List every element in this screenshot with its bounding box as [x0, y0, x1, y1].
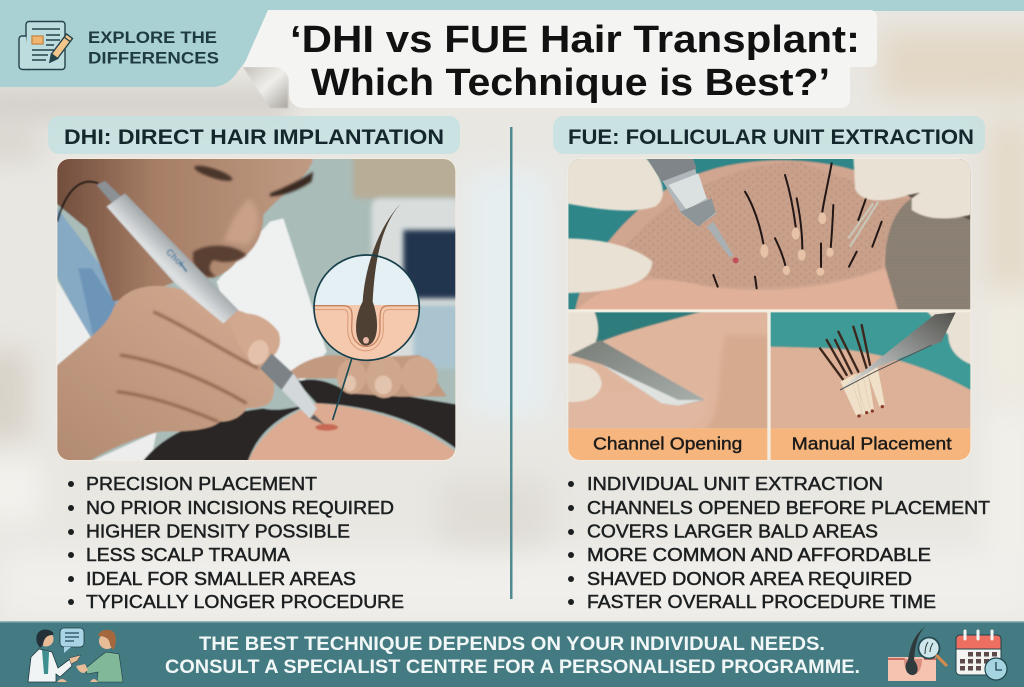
gloves — [565, 155, 975, 293]
caption: channel opening: Channel Opening — [593, 434, 742, 454]
list: DHI benefits: IDEAL FOR SMALLER AREAS — [86, 568, 356, 589]
list: DHI benefits: NO PRIOR INCISIONS REQUIRED — [86, 497, 394, 518]
icon: follicle with magnifier — [888, 627, 946, 681]
callout line — [333, 359, 352, 420]
list: FUE benefits: COVERS LARGER BALD AREAS — [587, 520, 878, 542]
list: FUE benefits: CHANNELS OPENED BEFORE PLACEMENT — [587, 497, 990, 518]
clinic backdrop — [50, 155, 460, 465]
list: DHI benefits: HIGHER DENSITY POSSIBLE — [86, 520, 350, 542]
heading: DHI: DHI: DIRECT HAIR IMPLANTATION — [64, 126, 444, 149]
caption: manual placement: Manual Placement — [792, 434, 952, 454]
list: FUE benefits: SHAVED DONOR AREA REQUIRED — [587, 568, 912, 589]
inset follicle diagram — [310, 198, 423, 365]
explore the differences label: DIFFERENCES — [88, 48, 219, 68]
footer banner — [0, 621, 1024, 687]
list: FUE benefits: FASTER OVERALL PROCEDURE TIME — [587, 591, 936, 612]
footer message — [165, 634, 860, 678]
icon: newspaper and pencil — [19, 22, 72, 70]
list: FUE benefits: MORE COMMON AND AFFORDABLE — [587, 544, 931, 565]
footer message: THE BEST TECHNIQUE DEPENDS ON YOUR INDIVIDUAL NEEDS. — [199, 634, 825, 655]
punch tool — [645, 155, 733, 258]
title panel — [243, 10, 877, 108]
top teal band and explore tab — [0, 0, 1024, 87]
scrubs and coat — [217, 218, 327, 382]
explore the differences label — [88, 28, 219, 68]
main title — [290, 19, 860, 104]
list: DHI benefits: TYPICALLY LONGER PROCEDURE — [86, 591, 404, 612]
main title: Which Technique is Best?’ — [311, 62, 830, 104]
list: FUE benefits — [568, 473, 990, 612]
footer message: CONSULT A SPECIALIST CENTRE FOR A PERSONALISED PROGRAMME. — [165, 657, 860, 678]
photo: FUE extraction on scalp — [565, 155, 975, 312]
scalp and hair — [297, 379, 460, 452]
implanter pen — [57, 182, 98, 222]
photo: manual placement — [767, 309, 974, 432]
list: FUE benefits: INDIVIDUAL UNIT EXTRACTION — [587, 473, 883, 494]
panel: FUE photos — [568, 158, 971, 461]
heading: DHI — [48, 116, 460, 154]
doctor face — [50, 155, 313, 302]
list: DHI benefits — [68, 473, 404, 612]
panel: DHI photo — [56, 158, 456, 461]
supporting fingers — [290, 355, 447, 397]
main title: ‘DHI vs FUE Hair Transplant: — [290, 19, 860, 61]
caption: channel opening — [568, 428, 767, 460]
tweezers — [848, 202, 878, 247]
list: DHI benefits: LESS SCALP TRAUMA — [86, 544, 291, 565]
panel: DHI photo: Choi — [164, 247, 186, 269]
heading: FUE — [553, 116, 985, 154]
caption: manual placement — [771, 428, 970, 460]
explore the differences label: EXPLORE THE — [88, 28, 217, 47]
heading: FUE: FUE: FOLLICULAR UNIT EXTRACTION — [568, 126, 974, 149]
icon: calendar with clock — [956, 631, 1007, 680]
list: DHI benefits: PRECISION PLACEMENT — [86, 473, 317, 494]
hand holding the pen — [50, 286, 279, 465]
photo: channel opening — [565, 309, 771, 432]
icon: doctor and patient consultation — [28, 628, 123, 682]
